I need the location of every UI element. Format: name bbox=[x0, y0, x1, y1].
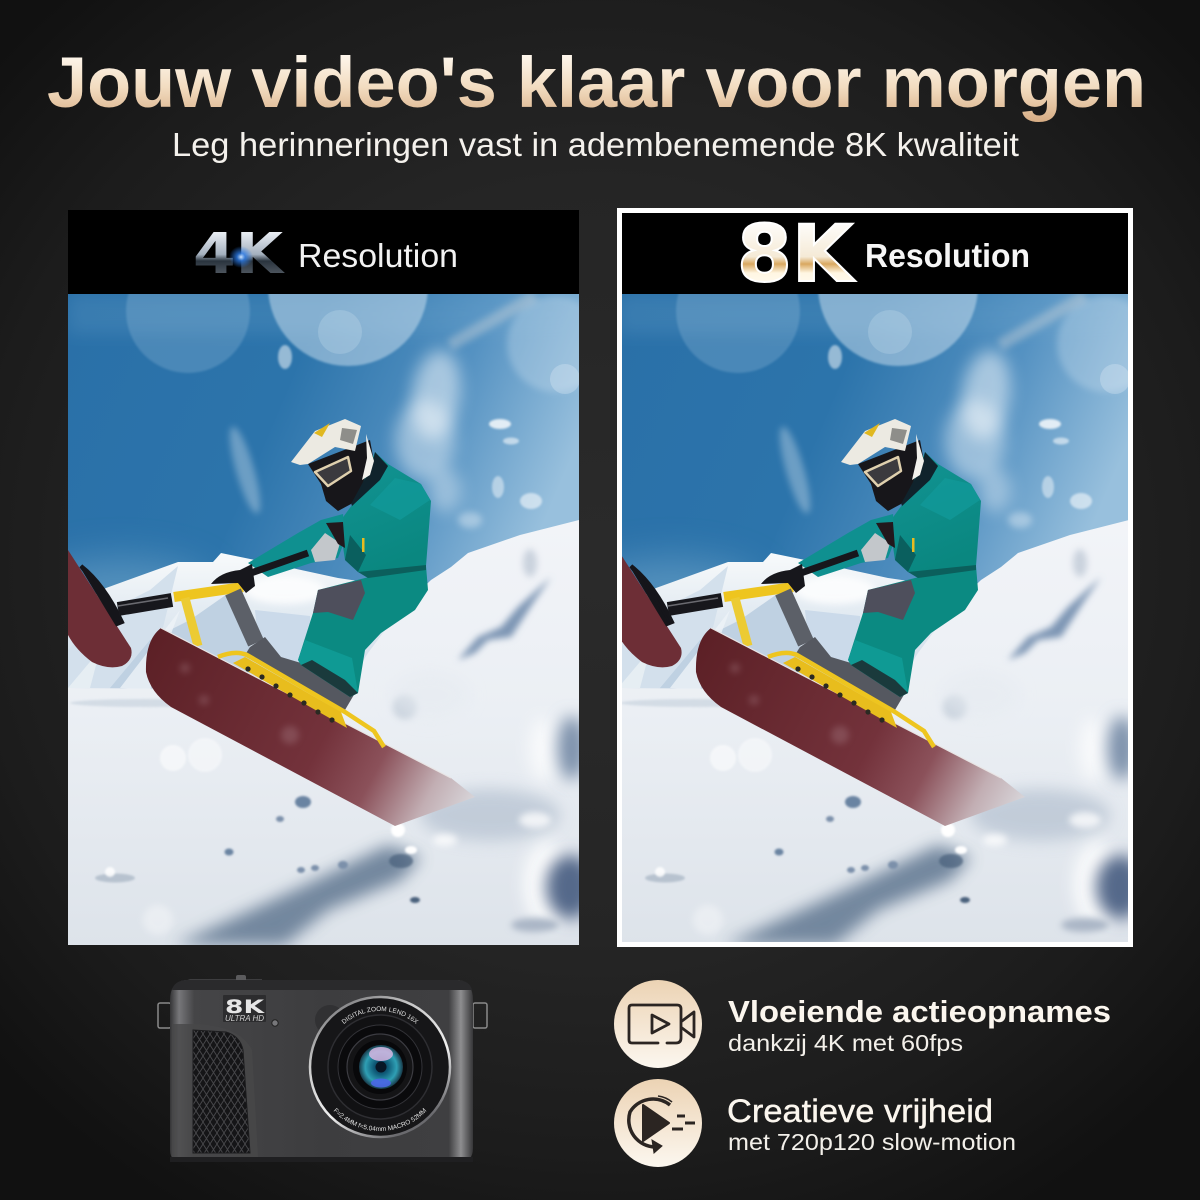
feature detail: met 720p120 slow-motion bbox=[728, 1129, 1016, 1155]
trousers bbox=[298, 566, 428, 697]
top plate bbox=[172, 980, 472, 990]
panel: 8K comparison bbox=[617, 208, 1133, 947]
badge: 8K ultra HD: 8K bbox=[225, 996, 266, 1018]
rider bbox=[211, 419, 431, 697]
jacket bbox=[341, 452, 431, 575]
grip knurling bbox=[193, 1030, 250, 1153]
4K logo: 4K bbox=[193, 222, 286, 287]
top controls bbox=[182, 979, 262, 985]
label: Resolution bbox=[865, 237, 1030, 274]
lens: F=2.4MM f=5.04mm MACRO 52MM bbox=[334, 1108, 426, 1131]
arm bbox=[248, 514, 345, 577]
photo: snow biker sharp bbox=[622, 294, 1128, 942]
label: Resolution bbox=[298, 237, 458, 274]
lens bbox=[308, 996, 452, 1138]
strap lugs bbox=[158, 1003, 487, 1028]
subtitle: Leg herinneringen vast in adembenemende 8K kwaliteit bbox=[172, 126, 1019, 163]
feature heading: Vloeiende actieopnames bbox=[728, 994, 1111, 1029]
goggles bbox=[315, 457, 351, 486]
header: 4K resolution bbox=[68, 210, 579, 294]
feature: slow motion bbox=[614, 1079, 1016, 1167]
helmet bbox=[308, 440, 374, 511]
heading: Jouw video's klaar voor morgen bbox=[47, 44, 1146, 123]
front ski bbox=[68, 550, 132, 667]
product: camera bbox=[157, 975, 488, 1162]
distant mountains bbox=[68, 553, 420, 720]
badge: 8K ultra HD: ULTRA HD bbox=[225, 1014, 264, 1023]
glass bbox=[359, 1045, 403, 1089]
sky bbox=[30, 294, 579, 714]
title and subtitle bbox=[47, 44, 1146, 163]
glove bbox=[311, 533, 340, 562]
badge: 8K ultra HD bbox=[223, 995, 266, 1023]
yellow board rail bbox=[218, 653, 384, 747]
main board bbox=[146, 628, 475, 826]
body bbox=[170, 980, 473, 1162]
boot and binding bbox=[245, 637, 355, 710]
lens engraving: DIGITAL ZOOM LEND 16X bbox=[342, 1006, 419, 1024]
header: 8K resolution bbox=[622, 213, 1128, 294]
icon: video camera bbox=[614, 980, 702, 1068]
handle tube and yellow frame bbox=[118, 587, 256, 646]
bokeh circles and light streak bbox=[126, 206, 603, 394]
snow shadow streak bbox=[175, 845, 421, 945]
icon: slow motion play bbox=[614, 1079, 702, 1167]
foreground snow slope bbox=[68, 520, 579, 945]
feature: smooth action bbox=[614, 980, 1111, 1068]
clouds bbox=[224, 345, 542, 528]
snow clumps and debris bbox=[95, 716, 594, 932]
feature heading: Creatieve vrijheid bbox=[727, 1093, 993, 1129]
feature detail: dankzij 4K met 60fps bbox=[728, 1030, 963, 1056]
handlebar bbox=[251, 553, 308, 573]
panel: 4K comparison bbox=[68, 210, 579, 945]
photo: snow biker bbox=[68, 294, 579, 945]
grip contour bbox=[172, 1024, 258, 1157]
indicator bbox=[272, 1020, 278, 1026]
thigh patch bbox=[313, 580, 365, 620]
